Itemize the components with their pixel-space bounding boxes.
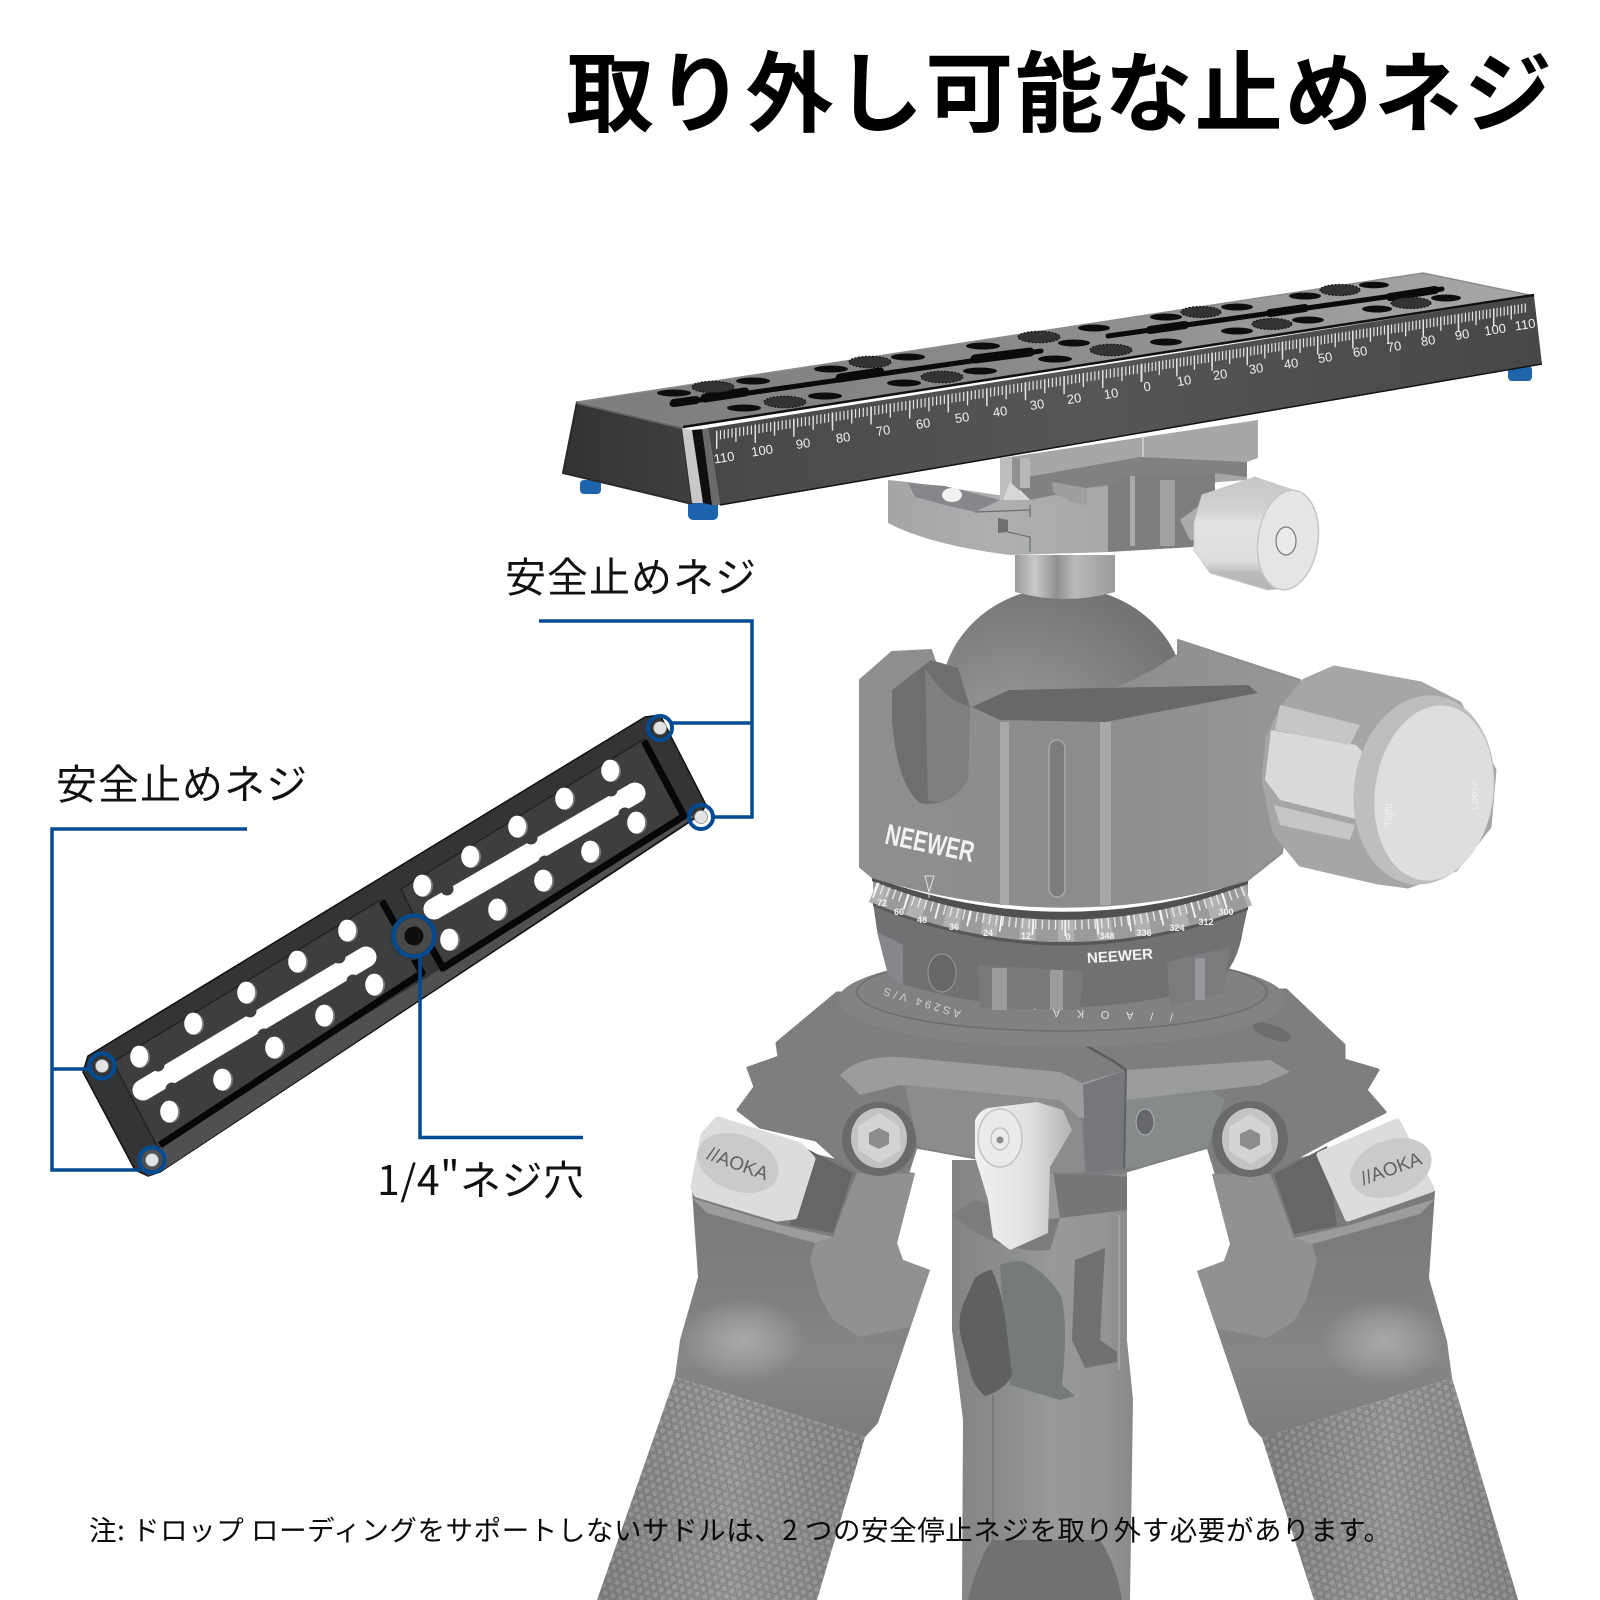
ruler numbers: 80 — [835, 429, 851, 446]
large locking knob — [1263, 667, 1507, 894]
ball head body: NEEWER — [882, 819, 977, 869]
angle scale ring: 348 — [1099, 931, 1115, 941]
photo: tripod and ball head (faded) — [597, 420, 1518, 1600]
ruler numbers: 90 — [795, 435, 811, 452]
ruler numbers: 20 — [1066, 390, 1082, 407]
ruler numbers: 100 — [750, 441, 774, 460]
ruler numbers: 60 — [915, 415, 931, 432]
ruler numbers: 50 — [1317, 349, 1333, 366]
plate front face — [708, 296, 1542, 505]
ball — [941, 587, 1185, 807]
center leg lock knob — [959, 1248, 1117, 1400]
blue foot front — [688, 500, 718, 520]
ruler numbers: 110 — [1514, 315, 1536, 334]
plate body — [83, 715, 706, 1176]
left pocket — [113, 899, 424, 1148]
lower rim shade — [138, 812, 702, 1176]
top holes — [657, 282, 1461, 412]
angle scale ring — [872, 877, 1248, 967]
callout: quarter inch hole — [394, 916, 583, 1138]
ruler ticks left half — [716, 369, 1141, 440]
ruler numbers: 10 — [1103, 385, 1119, 402]
label: quarter inch hole: 1/4"ネジ穴 — [377, 1147, 584, 1207]
ruler numbers — [713, 315, 1536, 467]
knurled screws — [692, 284, 1431, 408]
angle scale ring: 312 — [1198, 917, 1214, 927]
ruler numbers: 0 — [1142, 379, 1152, 394]
blue foot left — [580, 480, 601, 494]
ruler numbers: 110 — [713, 448, 735, 467]
ruler numbers: 10 — [1176, 372, 1192, 389]
ruler numbers: 90 — [1454, 326, 1470, 343]
grained edge and front arris — [577, 295, 1542, 505]
AOKA pad left: //AOKA — [704, 1144, 771, 1185]
ruler numbers: 80 — [1420, 332, 1436, 349]
blue foot right — [1508, 366, 1532, 381]
callout: safety screws top right — [539, 621, 752, 829]
center hub — [389, 916, 433, 960]
quick release clamp — [888, 420, 1258, 555]
neck — [1015, 555, 1115, 599]
title: 取り外し可能な止めネジ — [566, 24, 1552, 151]
tripod spider base — [738, 990, 1385, 1173]
angle scale ring: 324 — [1169, 923, 1185, 933]
AOKA pad right — [1320, 1122, 1440, 1218]
flange knob bolt right — [1212, 1101, 1288, 1177]
large locking knob: Loose — [1469, 780, 1481, 810]
small knob with bubble level — [1180, 477, 1325, 594]
angle scale ring: 24 — [983, 928, 993, 938]
angle scale ring: 12 — [1021, 931, 1031, 941]
angle scale ring: 0 — [1065, 932, 1071, 942]
plate end face — [563, 402, 692, 503]
ruler ticks right half — [1141, 308, 1528, 373]
ruler numbers: 100 — [1483, 320, 1507, 339]
mounting holes — [130, 760, 645, 1123]
label: safety screw left: 安全止めネジ — [56, 751, 307, 811]
corner bevel — [682, 428, 720, 505]
mounting hole walls — [132, 760, 647, 1123]
ball head lower cylinder and mounting disc: AS294 V/S — [882, 985, 962, 1019]
right pocket — [401, 739, 686, 971]
angle scale ring: 336 — [1136, 928, 1152, 938]
angle scale ring: 60 — [894, 907, 904, 917]
left leg — [597, 1145, 930, 1600]
center leg — [952, 1160, 1133, 1600]
angle scale ring: 36 — [949, 922, 959, 932]
ruler numbers: 40 — [992, 403, 1008, 420]
ruler numbers: 30 — [1029, 396, 1045, 413]
ruler numbers: 20 — [1212, 366, 1228, 383]
flange knob bolt left — [842, 1102, 916, 1176]
ruler numbers: 40 — [1283, 355, 1299, 372]
ruler numbers: 70 — [875, 422, 891, 439]
label: safety screw top: 安全止めネジ — [505, 544, 756, 604]
ball head body — [860, 640, 1300, 907]
ruler numbers: 50 — [954, 409, 970, 426]
quarter inch hole — [396, 918, 432, 954]
ruler numbers: 60 — [1352, 343, 1368, 360]
angle scale ring: 72 — [877, 898, 887, 908]
footnote: 注: ドロップ ローディングをサポートしないサドルは、2 つの安全停止ネジを取り外す必要があります。 — [89, 1508, 1391, 1548]
right slot — [434, 784, 635, 920]
AOKA pad right: //AOKA — [1358, 1149, 1425, 1190]
right leg — [1197, 1146, 1518, 1600]
left slot — [143, 950, 366, 1096]
top slots — [672, 289, 1442, 404]
angle scale ring: 48 — [917, 915, 927, 925]
ruler numbers: 70 — [1386, 338, 1402, 355]
silver locking lever — [975, 1102, 1072, 1250]
ball head lower cylinder and mounting disc: //AOKA. — [1033, 1006, 1173, 1022]
photo: dovetail plate in perspective — [563, 273, 1542, 520]
ruler numbers: 30 — [1248, 360, 1264, 377]
plate top face — [577, 273, 1534, 427]
safety screws — [96, 722, 708, 1166]
angle scale ring: NEEWER — [1087, 946, 1154, 967]
large locking knob: Tight — [1383, 803, 1395, 827]
angle scale ring: 300 — [1218, 907, 1234, 917]
AOKA pad left — [689, 1120, 812, 1218]
callout: safety screws left — [52, 829, 247, 1172]
photo: plate underside — [83, 715, 708, 1176]
ball head lower cylinder and mounting disc — [838, 903, 1286, 1047]
